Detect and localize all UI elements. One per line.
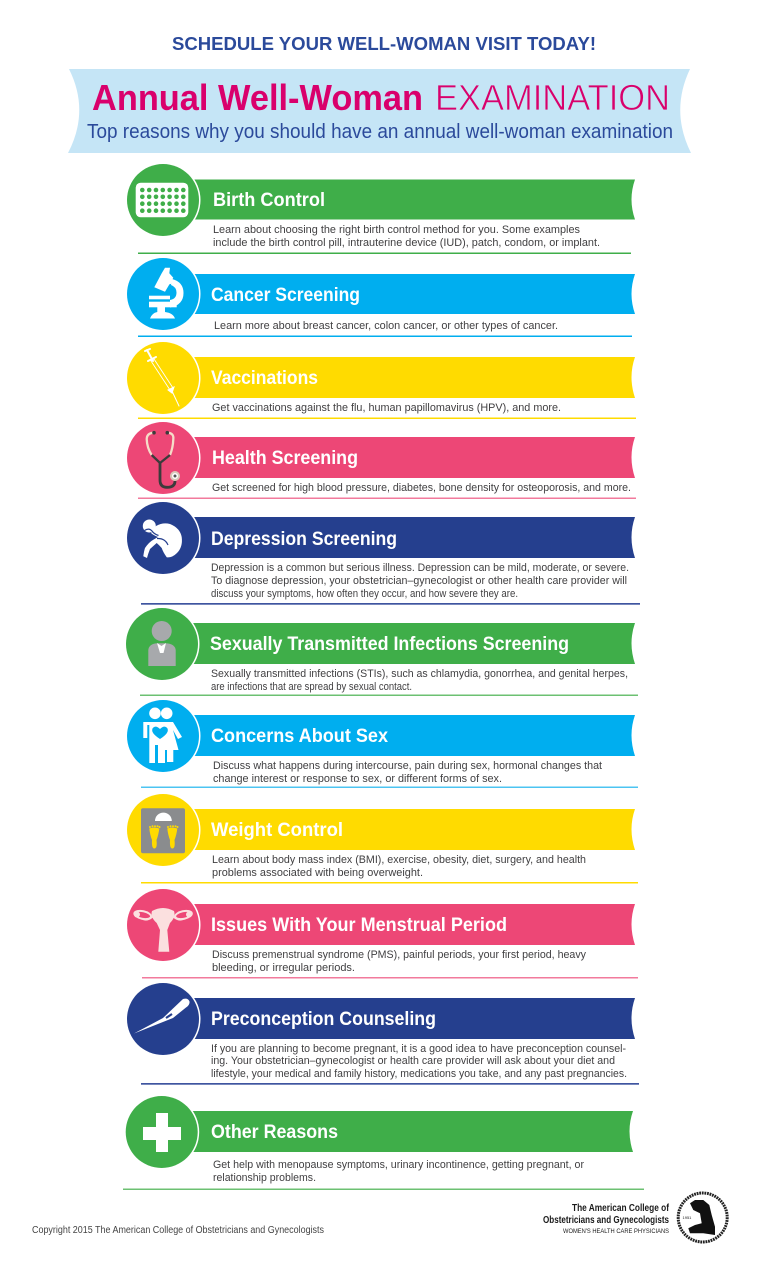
- copyright: Copyright 2015 The American College of Obstetricians and Gynecologists: [32, 1225, 324, 1236]
- heading: Other Reasons: [211, 1122, 338, 1143]
- description: problems associated with being overweight.: [212, 867, 423, 879]
- description: change interest or response to sex, or different forms of sex.: [213, 773, 502, 785]
- heading: Weight Control: [211, 820, 343, 841]
- description: Discuss premenstrual syndrome (PMS), painful periods, your first period, heavy: [212, 949, 587, 961]
- logo: college name: The American College of: [572, 1203, 670, 1214]
- panel: cancer screening: [126, 256, 635, 337]
- heading: Birth Control: [213, 190, 325, 211]
- description: To diagnose depression, your obstetrician–gynecologist or other health care provider will: [211, 575, 627, 587]
- panel: vaccinations: [126, 340, 636, 419]
- logo: college name: Obstetricians and Gynecologists: [543, 1215, 669, 1226]
- logo: college name: [543, 1203, 670, 1235]
- description: [212, 949, 587, 974]
- icon: medical cross: [143, 1113, 181, 1152]
- heading: Vaccinations: [211, 368, 318, 389]
- icon: microscope: [149, 268, 184, 318]
- panel: depression screening: [126, 500, 640, 605]
- description: If you are planning to become pregnant, it is a good idea to have preconception counsel-: [211, 1043, 626, 1055]
- heading: Depression Screening: [211, 529, 397, 550]
- heading: Concerns About Sex: [211, 726, 388, 747]
- panel: concerns about sex: [126, 698, 638, 788]
- icon: pill pack: [136, 183, 188, 217]
- icon: stethoscope: [147, 431, 179, 487]
- description: Sexually transmitted infections (STIs), such as chlamydia, gonorrhea, and genital herpes,: [211, 668, 628, 680]
- title banner: [68, 69, 691, 153]
- icon: curled up figure: [143, 520, 182, 558]
- description: [211, 668, 628, 693]
- logo: seal: 1951: [682, 1215, 692, 1220]
- top call to action heading: SCHEDULE YOUR WELL-WOMAN VISIT TODAY!: [172, 34, 596, 54]
- icon: thermometer: [134, 999, 190, 1034]
- description: Learn more about breast cancer, colon cancer, or other types of cancer.: [214, 320, 558, 332]
- description: ing. Your obstetrician–gynecologist or health care provider will ask about your diet and: [211, 1055, 615, 1067]
- icon: uterus: [134, 908, 193, 952]
- subtitle: Top reasons why you should have an annual well-woman examination: [87, 121, 673, 143]
- icon: person: [148, 621, 176, 666]
- logo: seal: [678, 1193, 727, 1242]
- icon: couple with heart: [143, 708, 182, 763]
- description: Depression is a common but serious illness. Depression can be mild, moderate, or severe.: [211, 562, 629, 574]
- description: include the birth control pill, intrauterine device (IUD), patch, condom, or implant.: [213, 237, 600, 249]
- panel: preconception counseling: [126, 982, 639, 1085]
- description: Get help with menopause symptoms, urinary incontinence, getting pregnant, or: [213, 1159, 584, 1171]
- description: bleeding, or irregular periods.: [212, 962, 355, 974]
- description: Learn about choosing the right birth control method for you. Some examples: [213, 224, 581, 236]
- description: discuss your symptoms, how often they occur, and how severe they are.: [211, 588, 518, 600]
- description: are infections that are spread by sexual contact.: [211, 681, 412, 693]
- description: [213, 224, 600, 249]
- panel: health screening: [126, 420, 636, 499]
- description: [212, 854, 586, 879]
- description: [211, 562, 629, 600]
- main title: Annual Well-Woman: [92, 77, 423, 118]
- main title: EXAMINATION: [435, 77, 670, 118]
- panel: weight control: [126, 792, 638, 884]
- main title: [92, 77, 670, 118]
- heading: Cancer Screening: [211, 285, 360, 306]
- description: relationship problems.: [213, 1172, 316, 1184]
- heading: Sexually Transmitted Infections Screening: [210, 634, 569, 655]
- description: Discuss what happens during intercourse, pain during sex, hormonal changes that: [213, 760, 602, 772]
- panel: sexually transmitted infections screening: [124, 606, 638, 696]
- description: Get vaccinations against the flu, human papillomavirus (HPV), and more.: [212, 402, 561, 414]
- icon: bathroom scale: [141, 808, 185, 853]
- description: [211, 1043, 627, 1080]
- description: [213, 760, 602, 785]
- logo: college name: WOMEN'S HEALTH CARE PHYSICIANS: [563, 1228, 670, 1235]
- description: Get screened for high blood pressure, diabetes, bone density for osteoporosis, and more.: [212, 482, 631, 494]
- description: Learn about body mass index (BMI), exercise, obesity, diet, surgery, and health: [212, 854, 586, 866]
- heading: Preconception Counseling: [211, 1009, 436, 1030]
- icon: syringe: [145, 349, 179, 406]
- panel: issues with your menstrual period: [126, 888, 638, 978]
- description: lifestyle, your medical and family history, medications you take, and any past pregnancies.: [211, 1068, 627, 1080]
- heading: Issues With Your Menstrual Period: [211, 915, 507, 936]
- panel: other reasons: [123, 1094, 644, 1190]
- heading: Health Screening: [212, 448, 358, 469]
- description: [213, 1159, 584, 1184]
- panel: birth control: [126, 162, 635, 254]
